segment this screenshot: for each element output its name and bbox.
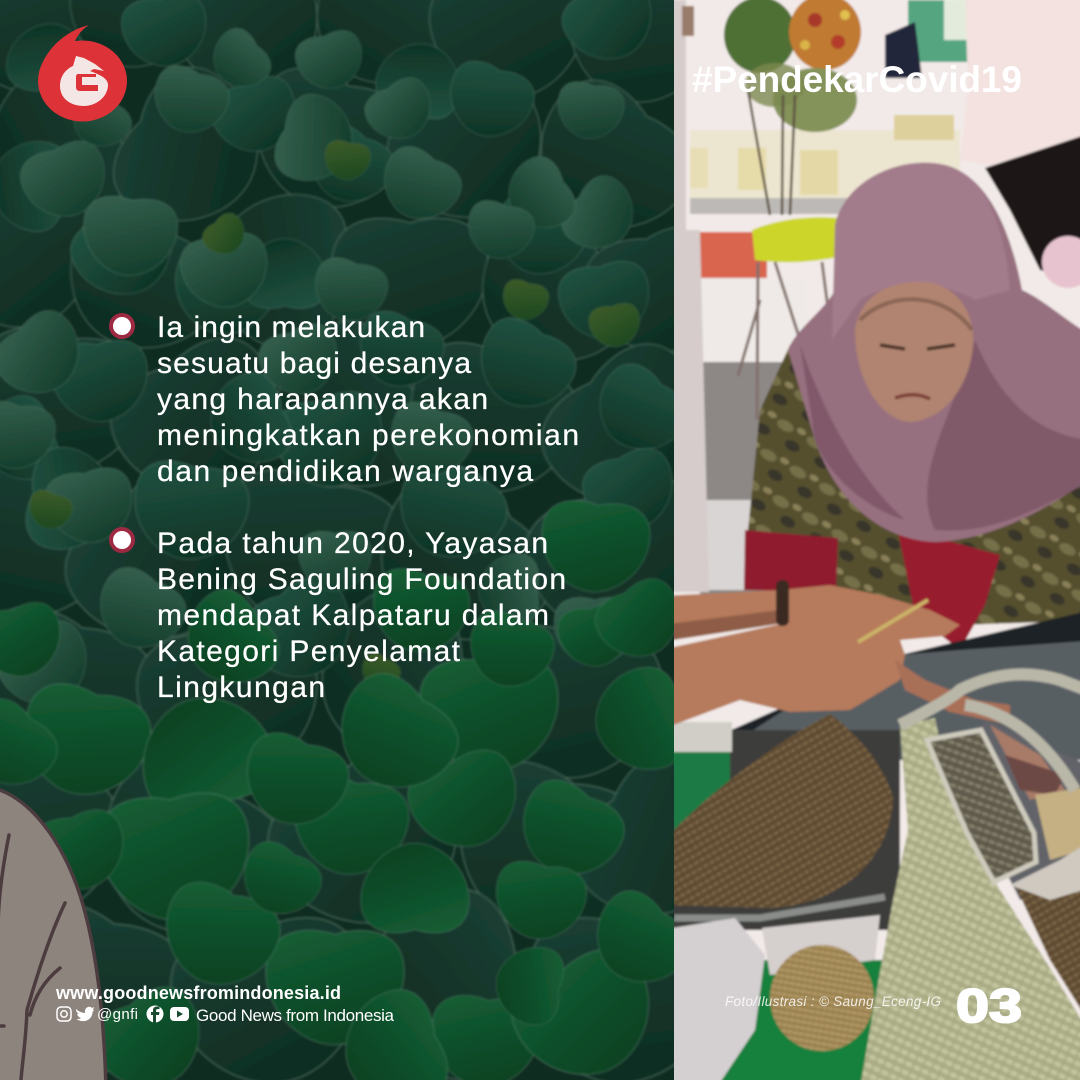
icon: youtube xyxy=(170,1007,189,1021)
photo credit: Foto/Ilustrasi : © Saung_Eceng-IG xyxy=(725,994,941,1009)
photo: hijab xyxy=(788,163,1080,542)
bullet marker xyxy=(111,529,133,551)
photo: light curtain and dark backdrop xyxy=(960,0,1080,288)
bullet text: dan pendidikan warganya xyxy=(157,455,533,488)
icon: twitter xyxy=(76,1007,94,1021)
bullet text: Lingkungan xyxy=(157,671,325,704)
photo: dark area under the work xyxy=(660,730,900,930)
page number: 03 xyxy=(956,979,1022,1032)
logo: white G mark xyxy=(60,56,108,106)
photo: small round basket xyxy=(770,945,874,1051)
bullet marker xyxy=(111,315,133,337)
icon: instagram xyxy=(57,1007,71,1021)
bullet text: Kategori Penyelamat xyxy=(157,635,461,668)
logo: GNFI red emblem xyxy=(38,25,127,122)
bullet text: Pada tahun 2020, Yayasan xyxy=(157,527,548,560)
text block: first bullet xyxy=(111,311,579,488)
footer: website and social handles xyxy=(55,983,395,1025)
photo: bag handle xyxy=(900,674,1080,790)
photo: dark trousers xyxy=(732,612,1080,732)
handle: @gnfi xyxy=(97,1006,138,1023)
bullet text: sesuatu bagi desanya xyxy=(157,347,471,380)
photo: interior of the bag xyxy=(984,722,1080,901)
photo: pale woven rim xyxy=(1012,846,1080,902)
bullet text: Ia ingin melakukan xyxy=(157,311,425,344)
photo: grey rope xyxy=(674,897,885,918)
panel: portrait photo of the craftswoman xyxy=(650,0,1080,1080)
channel name: Good News from Indonesia xyxy=(196,1006,395,1025)
photo: white paper bag xyxy=(674,916,766,1080)
photo: white bag strip xyxy=(762,915,880,975)
photo: left pillar xyxy=(674,0,710,594)
photo: right dark woven panel xyxy=(1016,888,1080,1010)
icon: facebook xyxy=(146,1006,164,1023)
photo: lime stool xyxy=(738,217,842,420)
photo: brown woven basket xyxy=(660,714,893,908)
bullet text: Bening Saguling Foundation xyxy=(157,563,566,596)
photo: green floor and rug xyxy=(660,722,890,1080)
text block: second bullet xyxy=(111,527,566,704)
photo: hall shelves and floor xyxy=(690,115,960,602)
bullet text: yang harapannya akan xyxy=(157,383,488,416)
photo: flower arrangement xyxy=(724,0,861,215)
photo: green sign and person in background xyxy=(682,0,970,78)
illustration: character shape at lower left xyxy=(0,788,106,1080)
bullet text: meningkatkan perekonomian xyxy=(157,419,579,452)
bullet text: mendapat Kalpataru dalam xyxy=(157,599,549,632)
photo background: exhibition hall xyxy=(674,0,1080,1020)
photo: arms and hands xyxy=(660,580,1010,730)
hashtag title: #PendekarCovid19 xyxy=(692,59,1022,100)
photo: grey trousers knee xyxy=(730,640,1080,760)
photo: face xyxy=(855,282,973,422)
photo: light woven bag xyxy=(858,718,1080,1080)
bullet text xyxy=(157,527,566,704)
panel: water hyacinth leaf photo background xyxy=(0,0,674,1080)
bullet text xyxy=(157,311,579,488)
photo: batik blouse xyxy=(744,345,1080,650)
photo: ribbed grey bag panel xyxy=(927,730,1036,882)
website url: www.goodnewsfromindonesia.id xyxy=(55,983,341,1003)
